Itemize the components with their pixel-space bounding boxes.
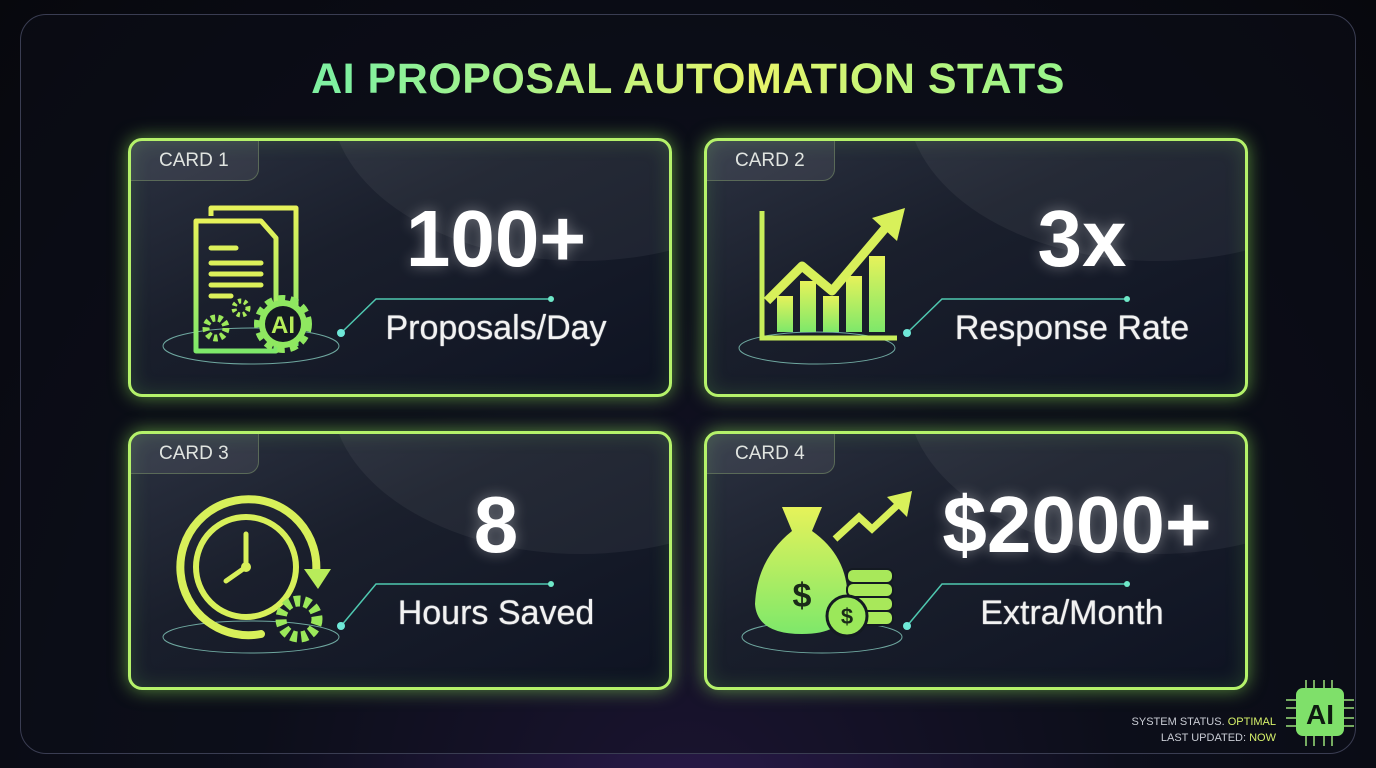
stat label: Response Rate <box>955 309 1189 347</box>
tab: card 2 <box>707 141 835 181</box>
status text: LAST UPDATED: NOW <box>1161 732 1276 744</box>
stat number: 3x <box>1038 194 1126 283</box>
stat number: 100+ <box>406 194 586 283</box>
tab: card 2: CARD 2 <box>735 150 805 171</box>
tab: card 1 <box>131 141 259 181</box>
status text: SYSTEM STATUS. OPTIMAL <box>1132 716 1276 728</box>
panel: card 4 <box>704 431 1248 690</box>
tab: card 1: CARD 1 <box>159 150 229 171</box>
status text <box>1132 716 1276 744</box>
panel: card 2 <box>704 138 1248 397</box>
panel: card 1 <box>128 138 672 397</box>
icon: bar chart with arrow <box>738 208 905 364</box>
title <box>0 55 1376 104</box>
stat label: Extra/Month <box>980 594 1164 632</box>
icon: clock with gear <box>162 495 340 654</box>
stat number: $2000+ <box>942 480 1212 569</box>
stat number: 8 <box>474 480 518 569</box>
stat label: Hours Saved <box>398 594 594 632</box>
icon: AI chip <box>1286 680 1354 746</box>
connector line <box>337 296 554 337</box>
connector line <box>903 296 1130 337</box>
icon: document with AI gears: AI <box>271 312 295 339</box>
icon: AI chip: AI <box>1306 699 1334 730</box>
title: AI PROPOSAL AUTOMATION STATS <box>311 55 1065 103</box>
icon: money bag with coins: $ <box>841 604 853 629</box>
connector line <box>903 581 1130 630</box>
stat label: Proposals/Day <box>385 309 607 347</box>
icon: money bag with coins: $ <box>793 577 812 615</box>
tab: card 3 <box>131 434 259 474</box>
connector line <box>337 581 554 630</box>
tab: card 3: CARD 3 <box>159 443 229 464</box>
panel: card 3 <box>128 431 672 690</box>
tab: card 4: CARD 4 <box>735 443 805 464</box>
tab: card 4 <box>707 434 835 474</box>
icon: document with AI gears <box>162 206 340 364</box>
icon: money bag with coins <box>742 491 912 654</box>
